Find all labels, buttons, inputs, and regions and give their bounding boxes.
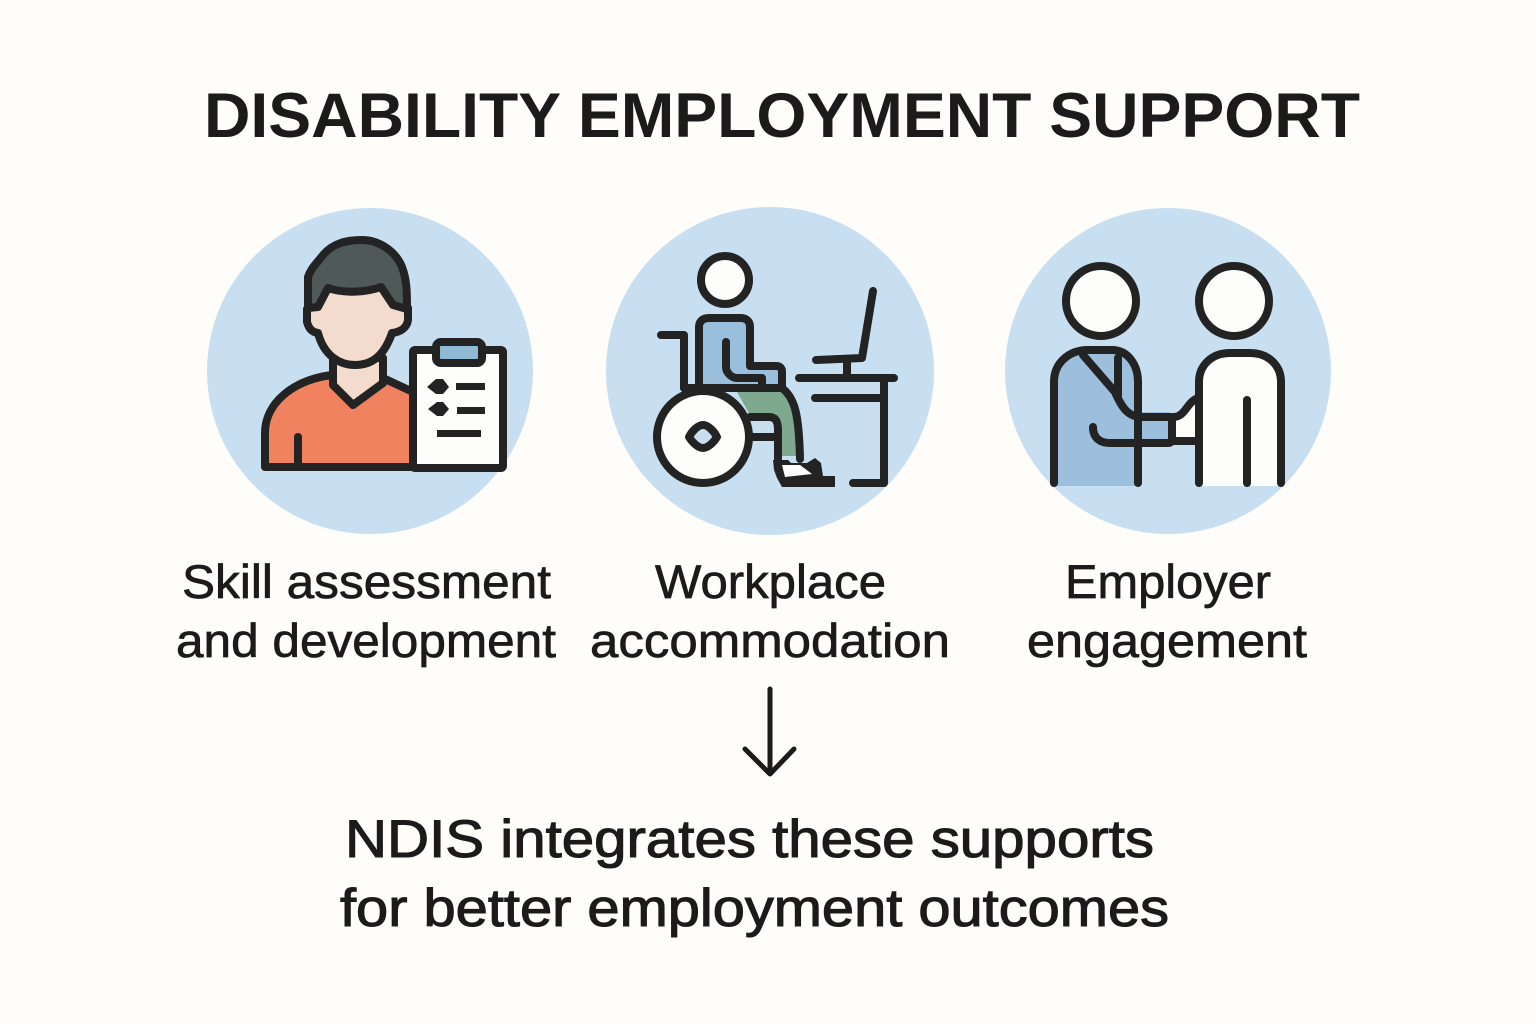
outcome statement — [340, 810, 1169, 938]
outcome statement: NDIS integrates these supports — [345, 810, 1154, 869]
label: workplace accommodation — [590, 555, 950, 667]
label: skill assessment: Skill assessment — [182, 555, 551, 608]
label: skill assessment — [176, 555, 556, 667]
title: DISABILITY EMPLOYMENT SUPPORT — [204, 81, 1360, 151]
outcome statement: for better employment outcomes — [340, 879, 1169, 938]
icon: person with clipboard — [207, 208, 533, 534]
label: employer engagement: engagement — [1027, 614, 1307, 667]
icon: wheelchair user at desk — [606, 207, 934, 535]
panel: employer engagement — [1005, 208, 1331, 667]
panel: skill assessment — [176, 208, 556, 667]
panel: workplace accommodation — [590, 207, 950, 667]
label: employer engagement: Employer — [1065, 555, 1271, 608]
label: skill assessment: and development — [176, 614, 556, 667]
arrow: down to outcome — [745, 689, 794, 774]
label: employer engagement — [1027, 555, 1307, 667]
label: workplace accommodation: Workplace — [655, 555, 886, 608]
label: workplace accommodation: accommodation — [590, 614, 950, 667]
icon: two people shaking hands — [1005, 208, 1331, 534]
